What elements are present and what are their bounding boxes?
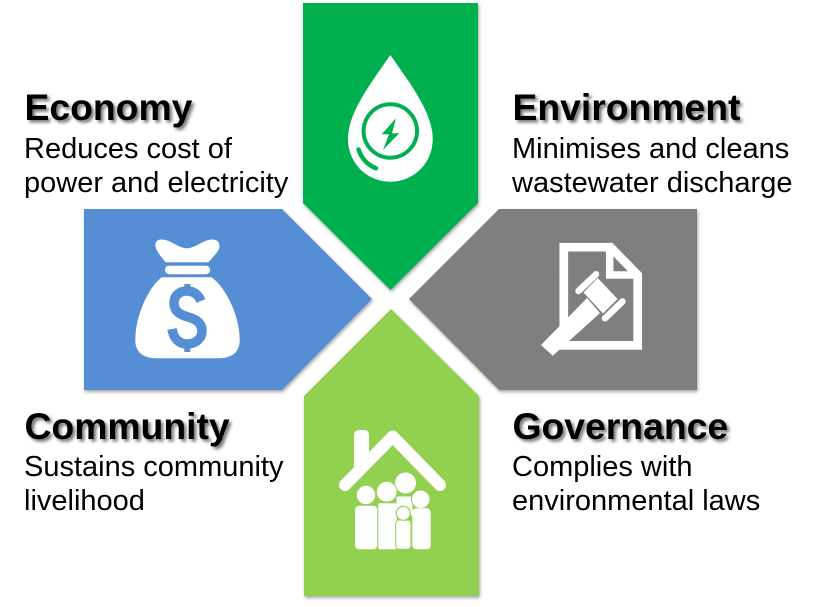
text block: governance: environmental laws: [512, 485, 760, 517]
heading: governance: Governance: [512, 405, 728, 447]
text block: environment: Minimises and cleans: [512, 133, 789, 165]
text block: governance: Complies with: [512, 451, 692, 483]
text block: economy: [24, 86, 289, 199]
text block: economy: power and electricity: [24, 167, 289, 199]
icon: gavel on document: [541, 247, 638, 356]
panel: environment arrow: [303, 3, 478, 290]
text block: governance: [512, 405, 760, 517]
text block: economy: Reduces cost of: [24, 133, 233, 165]
panel: community house arrow: [304, 309, 479, 596]
panel: governance arrow: [409, 209, 697, 390]
text block: community: livelihood: [24, 485, 145, 517]
heading: environment: Environment: [512, 86, 740, 128]
icon: family in house: [345, 430, 440, 549]
icon: water drop with energy bolt: [348, 55, 433, 182]
text block: environment: [511, 86, 792, 199]
icon: money bag: [135, 240, 240, 358]
text block: community: [24, 405, 284, 517]
text block: environment: wastewater discharge: [511, 167, 792, 199]
heading: community: Community: [24, 405, 230, 447]
text block: community: Sustains community: [24, 451, 284, 483]
panel: economy arrow: [84, 209, 372, 390]
heading: economy: Economy: [24, 86, 193, 128]
